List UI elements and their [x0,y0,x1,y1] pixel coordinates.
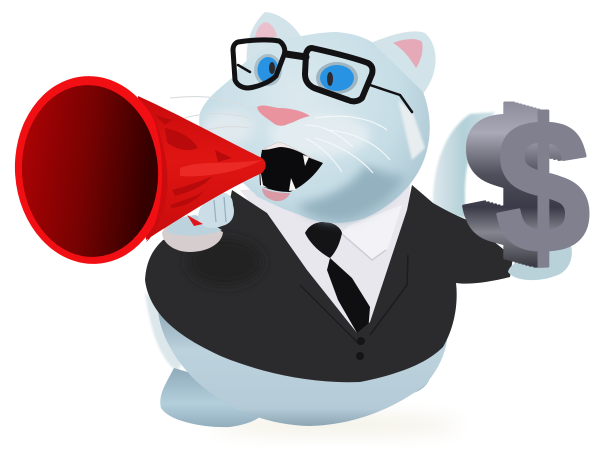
head patch [398,100,425,160]
black glasses [233,40,412,112]
mouth [260,142,323,201]
dollar extrusion: $ [483,79,578,291]
dollar extrusion: $ [486,80,582,292]
suit jacket [145,185,513,382]
right paw [508,243,572,280]
dollar extrusion: $ [465,74,560,286]
dollar extrusion: $ [468,75,564,287]
dollar sign [461,73,591,293]
fluffy side fur [145,292,190,372]
left eye [254,54,282,86]
ground shadow [210,415,460,435]
left foot [160,368,262,427]
upper lip [262,142,323,163]
belly fur [158,310,447,426]
dollar extrusion: $ [479,78,574,290]
raised hand and cuff [162,193,234,252]
megaphone handle [187,215,203,226]
lower lip [262,188,290,201]
dollar extrusion: $ [461,73,556,285]
fingers [198,193,234,228]
fangs [260,155,309,191]
left ear [247,12,303,72]
ears [247,12,436,94]
cone highlights [155,115,232,208]
jacket buttons [357,337,365,345]
head [199,32,430,223]
dollar extrusion: $ [491,81,586,293]
megaphone interior [16,80,164,262]
right ear [368,31,436,94]
muzzle highlight [270,113,370,157]
jaw shadow [297,165,405,221]
dollar extrusion: $ [476,77,571,289]
megaphone cone [138,96,266,240]
black tie [305,222,370,333]
lapel creases [300,255,408,345]
dollar face: $ [495,81,591,293]
right foot [400,370,431,395]
eyes [254,54,358,94]
megaphone mouth rim [9,71,173,269]
right eye [316,62,358,94]
tail [433,112,495,218]
pink nose [257,105,310,126]
shirt collar [340,205,402,260]
red megaphone [9,71,266,269]
dollar extrusion: $ [472,76,567,288]
white shirt [240,183,410,336]
whiskers [170,96,390,173]
jacket shading [187,238,263,286]
